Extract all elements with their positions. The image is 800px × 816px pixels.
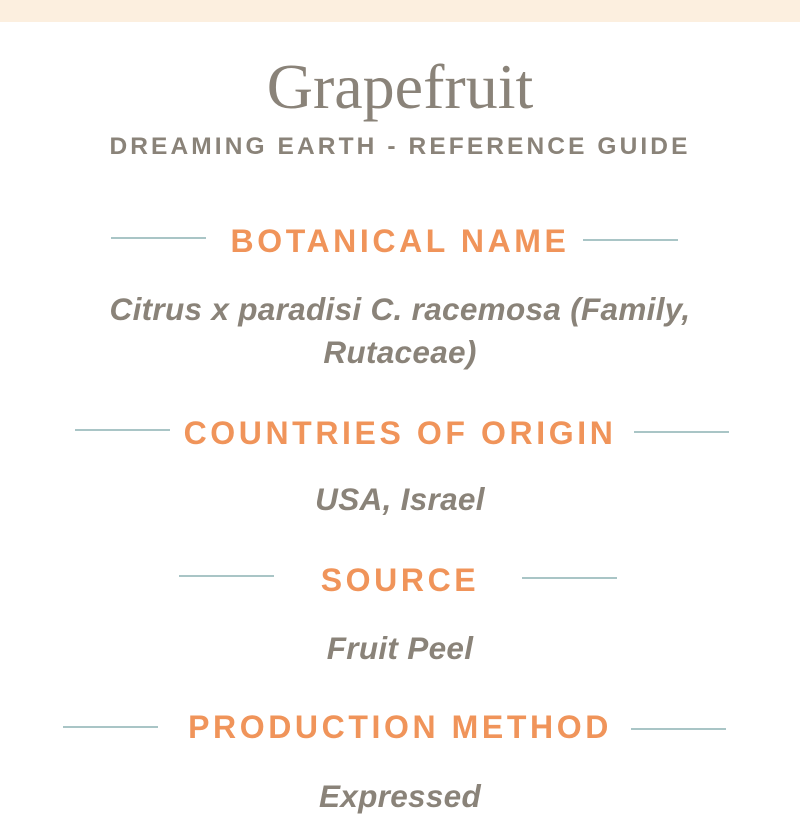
- top band: [0, 0, 800, 22]
- text: production: Expressed: [319, 778, 481, 814]
- text: botanical name: Rutaceae): [323, 334, 477, 370]
- subtitle: DREAMING EARTH - REFERENCE GUIDE: [109, 133, 691, 160]
- section: source: [179, 562, 617, 666]
- title: Grapefruit: [267, 51, 533, 122]
- section: botanical name: [110, 223, 690, 370]
- heading: countries: COUNTRIES OF ORIGIN: [184, 415, 616, 451]
- text: botanical name: Citrus x paradisi C. racemosa (Family,: [110, 291, 690, 327]
- heading: production: PRODUCTION METHOD: [188, 709, 612, 745]
- section: production method: [63, 709, 726, 814]
- text: source: Fruit Peel: [327, 630, 473, 666]
- section: countries of origin: [75, 415, 729, 517]
- heading: botanical name: BOTANICAL NAME: [230, 223, 569, 259]
- heading: source: SOURCE: [321, 562, 479, 598]
- text: botanical name: [110, 291, 690, 370]
- text: countries: USA, Israel: [315, 481, 485, 517]
